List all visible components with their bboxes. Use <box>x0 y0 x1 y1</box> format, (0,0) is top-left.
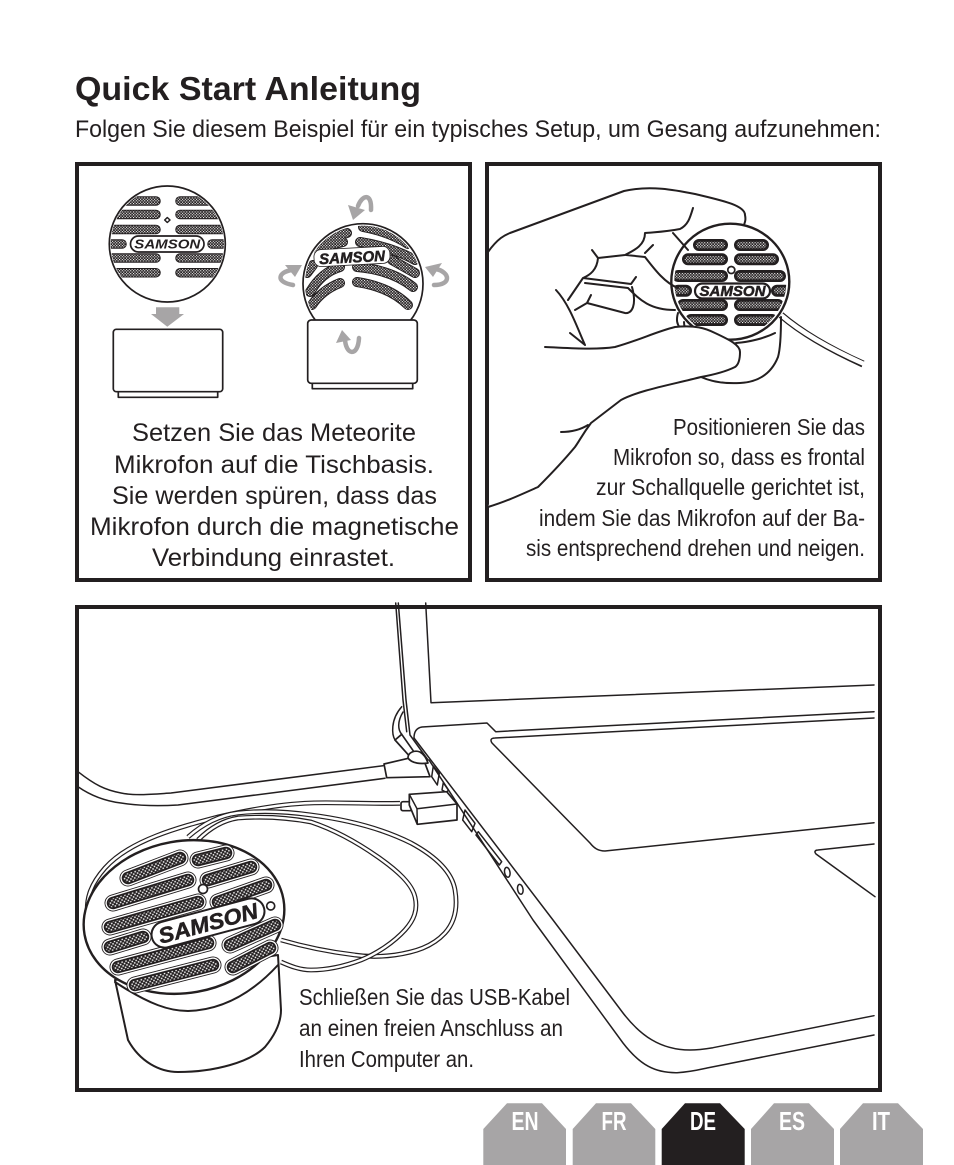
icon: large microphone <box>71 825 297 1072</box>
text block: positioning instructions <box>526 414 865 561</box>
arrows: rotate and tilt <box>280 197 447 352</box>
text block: positioning instructions: indem Sie das Mikrofon auf der Ba- <box>539 505 865 531</box>
icon: laptop ports <box>432 766 524 895</box>
text block: positioning instructions: Positionieren Sie das <box>673 414 865 440</box>
tab: FR: FR <box>602 1106 627 1136</box>
text block: placing instructions: Mikrofon auf die Tischbasis. <box>114 451 434 479</box>
tab: DE (active): DE <box>690 1106 716 1136</box>
text block: placing instructions: Mikrofon durch die magnetische <box>90 513 459 541</box>
panel: hand positioning microphone <box>487 164 880 580</box>
tab: DE (active) <box>662 1103 745 1165</box>
illustration: USB cable and plug <box>87 792 457 970</box>
illustration: cable into laptop <box>78 707 430 806</box>
text block: connect USB instructions: Ihren Computer an. <box>299 1046 474 1072</box>
title: Quick Start Anleitung <box>75 71 421 108</box>
text block: connect USB instructions <box>299 984 570 1072</box>
text block: placing instructions: Setzen Sie das Meteorite <box>132 419 416 447</box>
icon: tilted microphone on base <box>303 224 423 389</box>
tab: EN <box>483 1103 566 1165</box>
tab: ES <box>751 1103 834 1165</box>
icon: tilted microphone on base: SAMSON <box>319 248 387 268</box>
illustration: laptop <box>396 603 875 1073</box>
tab: EN: EN <box>512 1106 538 1136</box>
icon: front view of microphone head <box>108 186 226 302</box>
text block: positioning instructions: Mikrofon so, dass es frontal <box>613 444 865 470</box>
illustration: hand holding microphone <box>488 188 864 507</box>
language tabs <box>483 1103 923 1165</box>
tab: ES: ES <box>779 1106 805 1136</box>
text block: placing instructions: Verbindung einrastet. <box>152 544 395 572</box>
tab: IT: IT <box>872 1106 890 1136</box>
text block: placing instructions: Sie werden spüren, dass das <box>112 482 437 510</box>
icon: front view of microphone head: SAMSON <box>134 236 201 252</box>
arrow: place down <box>151 307 184 327</box>
panel: place microphone on base <box>77 164 470 580</box>
text block: positioning instructions: zur Schallquelle gerichtet ist, <box>596 474 865 500</box>
illustration: hand holding microphone: SAMSON <box>700 284 766 300</box>
text block: positioning instructions: sis entsprechend drehen und neigen. <box>526 535 865 561</box>
text block: connect USB instructions: Schließen Sie das USB-Kabel <box>299 984 570 1010</box>
icon: large microphone: SAMSON <box>156 898 262 949</box>
panel: connect USB to computer <box>71 603 880 1090</box>
text block: placing instructions <box>90 419 459 572</box>
icon: table base left <box>113 329 223 397</box>
text block: connect USB instructions: an einen freien Anschluss an <box>299 1015 563 1041</box>
subtitle: Folgen Sie diesem Beispiel für ein typisches Setup, um Gesang aufzunehmen: <box>75 116 881 143</box>
tab: IT <box>840 1103 923 1165</box>
tab: FR <box>573 1103 655 1165</box>
